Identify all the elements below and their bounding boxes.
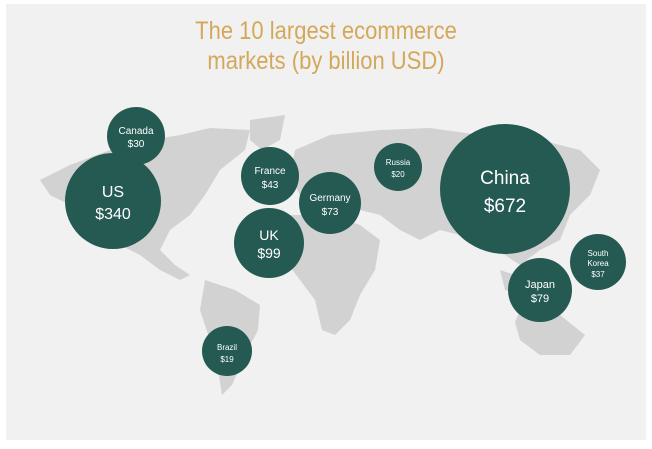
- bubble labels: $99: [257, 245, 281, 261]
- bubble labels: $43: [262, 180, 279, 191]
- bubbles: [65, 107, 626, 376]
- title: markets (by billion USD): [207, 47, 445, 75]
- bubble labels: Brazil: [217, 343, 237, 352]
- bubble labels: $672: [484, 196, 526, 217]
- bubble labels: $37: [591, 270, 605, 279]
- bubble labels: UK: [259, 227, 279, 243]
- bubble labels: France: [254, 166, 286, 177]
- bubble labels: Korea: [587, 259, 609, 268]
- title: [195, 17, 457, 75]
- bubble labels: $73: [322, 207, 339, 218]
- bubble labels: Japan: [525, 279, 555, 291]
- bubble labels: $30: [128, 139, 145, 150]
- bubble labels: Russia: [386, 158, 411, 167]
- bubble labels: China: [480, 168, 530, 189]
- bubble labels: South: [588, 249, 608, 258]
- bubble labels: Germany: [309, 193, 351, 204]
- bubble labels: Canada: [118, 126, 154, 137]
- bubble labels: [95, 126, 609, 364]
- map: continents: [40, 115, 600, 395]
- title: The 10 largest ecommerce: [195, 17, 457, 45]
- bubble labels: $79: [531, 293, 549, 305]
- bubble labels: $20: [391, 170, 405, 179]
- bubble labels: $19: [220, 355, 234, 364]
- bubble labels: $340: [95, 206, 131, 223]
- bubble labels: US: [102, 184, 124, 201]
